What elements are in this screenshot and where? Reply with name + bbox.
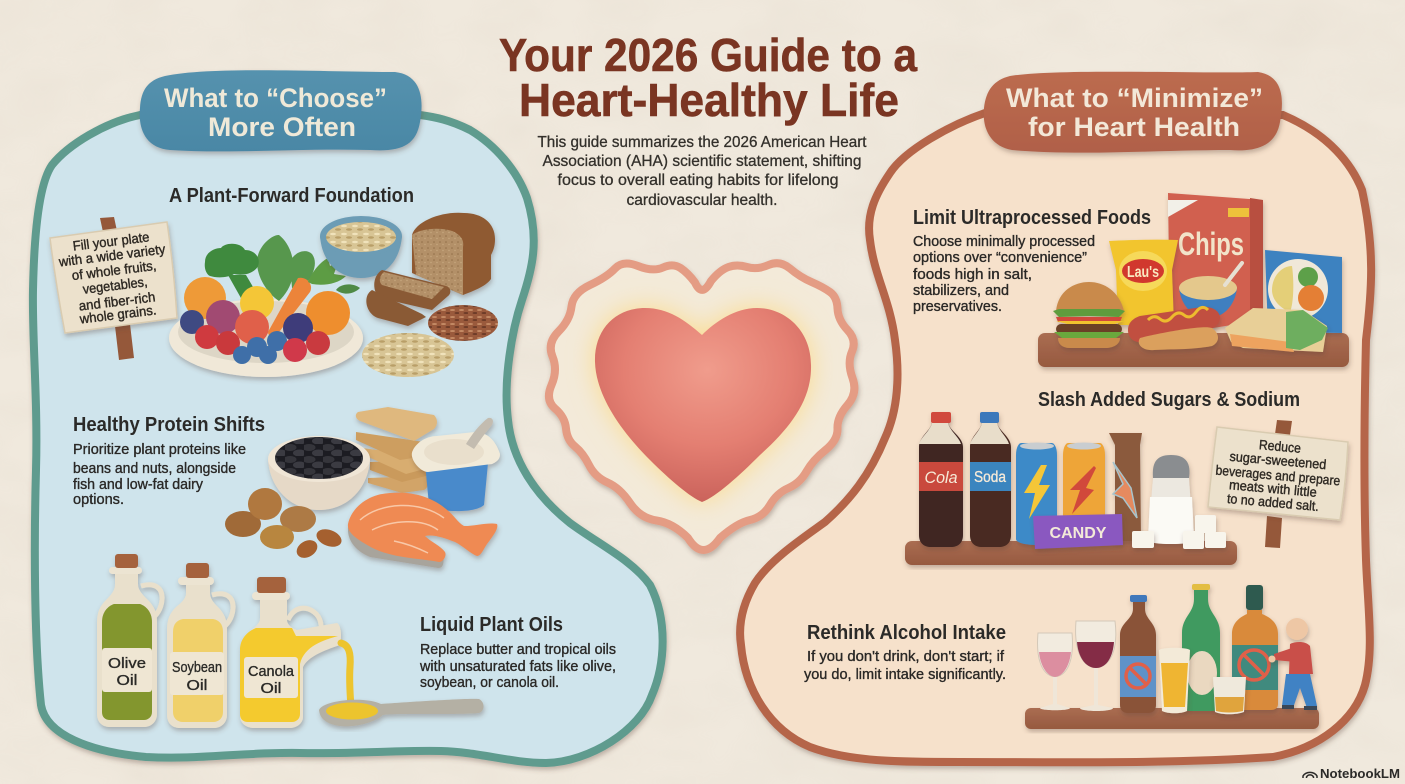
bottle: green	[1182, 584, 1220, 711]
food: crackers	[356, 407, 437, 493]
shelf: bottom	[1025, 708, 1319, 729]
badge: minimize	[984, 72, 1282, 153]
title: Your 2026 Guide to a	[499, 29, 917, 81]
text: oils body: Replace butter and tropical oils	[420, 642, 616, 658]
vegetables: broccoli	[205, 244, 260, 307]
text: intro summary: Association (AHA) scientific statement, shifting	[542, 153, 862, 170]
sugar cubes	[1132, 515, 1226, 549]
bottle: soybean oil	[167, 563, 233, 728]
badge: minimize: for Heart Health	[1028, 112, 1240, 142]
bottle: canola oil pouring: Oil	[260, 680, 282, 697]
clay figure blocking bottles	[1268, 618, 1317, 710]
food: yogurt cup	[412, 418, 500, 511]
bottle: olive oil: Olive	[108, 655, 146, 672]
bottle: cola: Cola	[924, 468, 958, 487]
panel: what to choose	[33, 70, 663, 763]
sign: reduce sugar: beverages and prepare	[1215, 463, 1341, 488]
shelf: top	[1038, 333, 1349, 367]
sign: fill your plate: Fill your plate	[72, 229, 150, 254]
vegetables: leafy greens	[257, 235, 315, 301]
notebooklm watermark: NotebookLM	[1320, 766, 1400, 781]
sign: fill your plate: with a wide variety	[57, 242, 166, 270]
food: bowl of oats	[320, 216, 402, 278]
title	[499, 29, 917, 126]
bottle: canola oil pouring	[240, 577, 341, 728]
food: chips bag	[1109, 240, 1178, 325]
food: bread loaf and slices	[366, 213, 495, 326]
sign: reduce sugar: sugar-sweetened	[1229, 449, 1327, 472]
whiskey tumbler	[1213, 677, 1246, 714]
food: frozen meal box	[1265, 250, 1342, 333]
food: salmon steak	[348, 493, 497, 568]
sign: fill your plate: and fiber-rich	[78, 289, 156, 314]
beer glass	[1159, 648, 1190, 713]
food: hot dog	[1128, 307, 1220, 350]
heading: plant-forward foundation: A Plant-Forward Foundation	[169, 185, 414, 207]
heading: limit ultraprocessed foods: Limit Ultraprocessed Foods	[913, 207, 1151, 229]
text: protein body: Prioritize plant proteins like	[73, 442, 246, 458]
badge: choose: What to “Choose”	[164, 83, 387, 113]
wine glass: red	[1076, 621, 1116, 711]
bottle: cola	[919, 412, 963, 547]
sign: reduce sugar: meats with little	[1228, 477, 1317, 500]
spoon with oil	[319, 699, 484, 726]
text: alcohol body	[804, 649, 1006, 683]
food: cereal box: Chips	[1178, 226, 1244, 262]
can: blue energy drink	[1016, 442, 1057, 545]
bottle: canola oil pouring: Canola	[248, 663, 295, 680]
text: alcohol body: If you don't drink, don't start; if	[807, 649, 1005, 665]
badge: choose: More Often	[208, 112, 356, 142]
food: oats pile	[362, 333, 454, 377]
heart glow	[595, 308, 811, 502]
text: intro summary: This guide summarizes the 2026 American Heart	[538, 134, 867, 151]
food: burger	[1053, 282, 1125, 348]
text: protein body: options.	[73, 492, 124, 508]
bottle: olive oil	[97, 554, 162, 727]
panel outline: minimize	[740, 113, 1371, 762]
panel: what to minimize	[740, 72, 1371, 762]
food: cereal box	[1168, 193, 1263, 335]
badge: minimize: What to “Minimize”	[1006, 83, 1263, 113]
vegetables: carrot	[268, 278, 311, 337]
food: chips bag: Lau's	[1127, 264, 1159, 281]
food: plate of fruit and vegetables	[169, 235, 363, 377]
sign: fill your plate: of whole fruits,	[71, 258, 157, 283]
clay heart	[595, 308, 811, 502]
text: oils body: with unsaturated fats like olive,	[419, 659, 616, 675]
heading: liquid plant oils: Liquid Plant Oils	[420, 614, 563, 636]
sign: reduce sugar	[1208, 420, 1348, 548]
bottle: soybean oil: Soybean	[172, 659, 222, 676]
food: candy bar: CANDY	[1050, 525, 1107, 542]
text: ultraprocessed body: Choose minimally processed	[913, 234, 1095, 250]
bottle: olive oil: Oil	[116, 672, 138, 689]
food: bowl of cereal	[1179, 263, 1242, 318]
text: intro summary	[538, 134, 867, 209]
sign: fill your plate: vegetables,	[82, 274, 148, 297]
sign: fill your plate: whole grains.	[78, 302, 157, 327]
wavy heart border	[549, 263, 854, 550]
text: ultraprocessed body: preservatives.	[913, 299, 1002, 315]
can: orange energy drink	[1063, 442, 1105, 525]
food: brown rice pile	[428, 305, 498, 341]
text: ultraprocessed body: stabilizers, and	[913, 283, 1009, 299]
bottle: soybean oil: Oil	[186, 677, 208, 694]
text: ultraprocessed body: options over “convenience”	[913, 250, 1087, 266]
text: ultraprocessed body: foods high in salt,	[913, 267, 1032, 283]
bottle: beer with no symbol	[1120, 595, 1156, 713]
wine glass: rosé	[1038, 633, 1072, 710]
heading: rethink alcohol intake: Rethink Alcohol Intake	[807, 622, 1006, 644]
title: Heart-Healthy Life	[519, 74, 899, 126]
icon: notebooklm logo	[1303, 772, 1317, 778]
badge: choose	[140, 70, 422, 151]
food: wrapped sandwich	[1225, 308, 1328, 352]
text: protein body: fish and low-fat dairy	[73, 477, 204, 493]
sign: reduce sugar: Reduce	[1258, 437, 1302, 456]
sign: reduce sugar: to no added salt.	[1226, 491, 1319, 514]
food: chocolate bar	[1109, 433, 1142, 541]
text: oils body: soybean, or canola oil.	[420, 675, 559, 691]
food: candy bar	[1033, 514, 1123, 549]
food: bowl of black beans	[268, 436, 370, 510]
text: alcohol body: you do, limit intake significantly.	[804, 667, 1006, 683]
text: ultraprocessed body	[913, 234, 1095, 315]
heading: healthy protein shifts: Healthy Protein Shifts	[73, 414, 265, 436]
bottle: soda	[970, 412, 1011, 547]
text: protein body: beans and nuts, alongside	[73, 461, 236, 477]
text: intro summary: cardiovascular health.	[626, 192, 778, 209]
food: mixed nuts	[225, 488, 344, 561]
salt shaker	[1148, 455, 1194, 544]
text: oils body	[419, 642, 616, 691]
oil stream	[341, 643, 351, 707]
shelf: middle	[905, 541, 1237, 565]
text: intro summary: focus to overall eating habits for lifelong	[558, 172, 838, 189]
text: protein body	[73, 442, 246, 508]
panel outline: choose	[33, 115, 663, 763]
bottle: whiskey with no symbol	[1232, 585, 1278, 710]
sign: fill your plate	[50, 217, 177, 360]
central heart icon	[549, 263, 854, 550]
bottle: soda: Soda	[974, 469, 1006, 486]
heading: slash added sugars and sodium: Slash Added Sugars & Sodium	[1038, 389, 1300, 411]
